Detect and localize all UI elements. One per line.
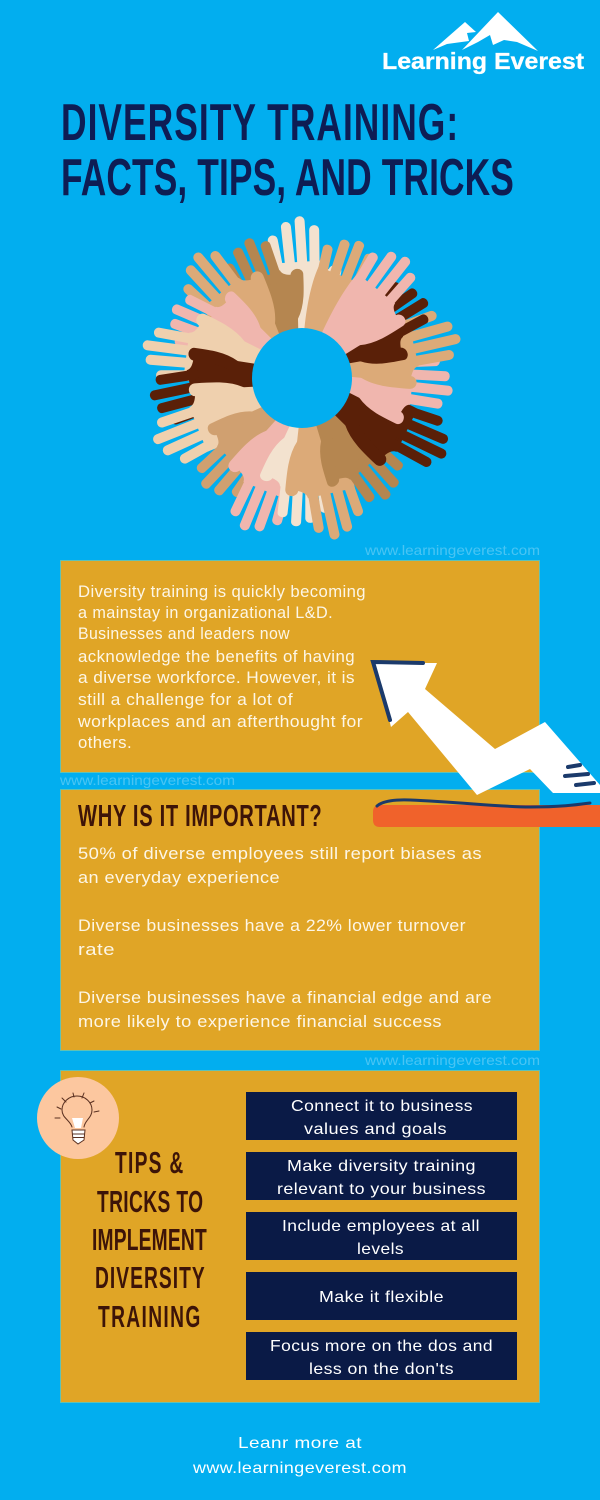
tip 3 xyxy=(246,1212,517,1260)
arrow accents xyxy=(373,662,594,785)
title xyxy=(61,94,514,207)
icon: rising arrow on orange bar xyxy=(373,662,600,827)
title: FACTS, TIPS, AND TRICKS xyxy=(61,149,514,207)
tip 5: less on the don'ts xyxy=(309,1361,454,1378)
title: DIVERSITY TRAINING: xyxy=(61,94,458,152)
intro text: Diversity training is quickly becoming xyxy=(78,583,366,601)
fact: financial edge: more likely to experience financial success xyxy=(78,1013,442,1031)
icon: mountains xyxy=(433,12,538,51)
orange bar xyxy=(373,805,600,827)
fact: financial edge xyxy=(78,989,492,1031)
tip 3: levels xyxy=(357,1241,404,1258)
tip 2 xyxy=(246,1152,517,1200)
heading: tips and tricks: IMPLEMENT xyxy=(92,1224,207,1257)
illustration: circle of hands xyxy=(144,219,463,541)
panel: tips and tricks xyxy=(37,1070,540,1402)
heading: tips and tricks: DIVERSITY xyxy=(95,1262,205,1295)
fact: financial edge: Diverse businesses have a financial edge and are xyxy=(78,989,492,1007)
fact: biases: 50% of diverse employees still report biases as xyxy=(78,845,482,863)
panel: why is it important xyxy=(60,790,540,1050)
watermark lower: www.learningeverest.com xyxy=(364,1052,540,1068)
panel: introduction xyxy=(60,560,540,772)
heading: tips and tricks xyxy=(92,1147,207,1334)
navy line on bar xyxy=(377,800,590,807)
watermark middle: www.learningeverest.com xyxy=(59,772,235,788)
fact: turnover: rate xyxy=(78,941,115,959)
white arrow xyxy=(375,663,600,795)
intro text: a diverse workforce. However, it is xyxy=(78,669,355,687)
logo: Learning Everest xyxy=(382,12,584,74)
tip 4: Make it flexible xyxy=(319,1289,444,1306)
tip 5: Focus more on the dos and xyxy=(270,1338,493,1355)
footer: learn more: www.learningeverest.com xyxy=(192,1460,407,1477)
intro text: others. xyxy=(78,734,132,752)
watermark top: www.learningeverest.com xyxy=(364,542,540,558)
tip 1 xyxy=(246,1092,517,1140)
heading: tips and tricks: TIPS & xyxy=(115,1147,183,1180)
heading: tips and tricks: TRICKS TO xyxy=(97,1186,203,1219)
footer: learn more xyxy=(192,1435,407,1477)
tip 1: Connect it to business xyxy=(291,1098,473,1115)
intro text: still a challenge for a lot of xyxy=(78,691,293,709)
logo wordmark: Learning Everest xyxy=(382,48,584,74)
heading: why is it important: WHY IS IT IMPORTANT? xyxy=(78,798,322,833)
intro text: workplaces and an afterthought for xyxy=(77,713,363,731)
tip 4 xyxy=(246,1272,517,1320)
fact: biases: an everyday experience xyxy=(78,869,280,887)
footer: learn more: Leanr more at xyxy=(238,1435,362,1452)
icon: light bulb xyxy=(37,1077,119,1159)
tip 2: Make diversity training xyxy=(287,1158,476,1175)
tip 2: relevant to your business xyxy=(277,1181,486,1198)
tip 3: Include employees at all xyxy=(282,1218,480,1235)
fact: turnover xyxy=(78,917,466,959)
heading: tips and tricks: TRAINING xyxy=(98,1301,200,1334)
intro text: a mainstay in organizational L&D. xyxy=(78,604,333,622)
fact: turnover: Diverse businesses have a 22% lower turnover xyxy=(78,917,466,935)
intro text: acknowledge the benefits of having xyxy=(78,648,355,666)
tip 1: values and goals xyxy=(304,1121,447,1138)
tip 5 xyxy=(246,1332,517,1380)
intro text: Businesses and leaders now xyxy=(78,625,290,643)
intro text xyxy=(77,583,366,752)
fact: biases xyxy=(78,845,482,887)
